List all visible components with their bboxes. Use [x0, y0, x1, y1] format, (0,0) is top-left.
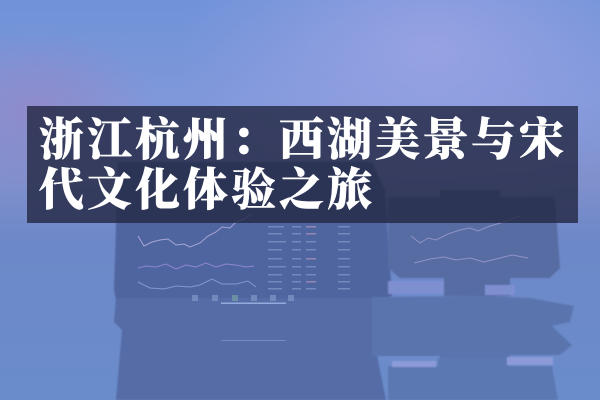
small screen line charts: [411, 216, 528, 263]
large screen toolbar icons: [192, 295, 294, 301]
small monitor silhouette: [372, 190, 574, 400]
large screen data table: [268, 226, 350, 290]
title text: 浙江杭州：西湖美景与宋代文化体验之旅: [39, 103, 567, 218]
large monitor silhouette: [114, 162, 392, 400]
title banner: [27, 106, 578, 223]
large screen line charts: [138, 214, 256, 289]
large screen underline and reflection: [221, 302, 286, 341]
